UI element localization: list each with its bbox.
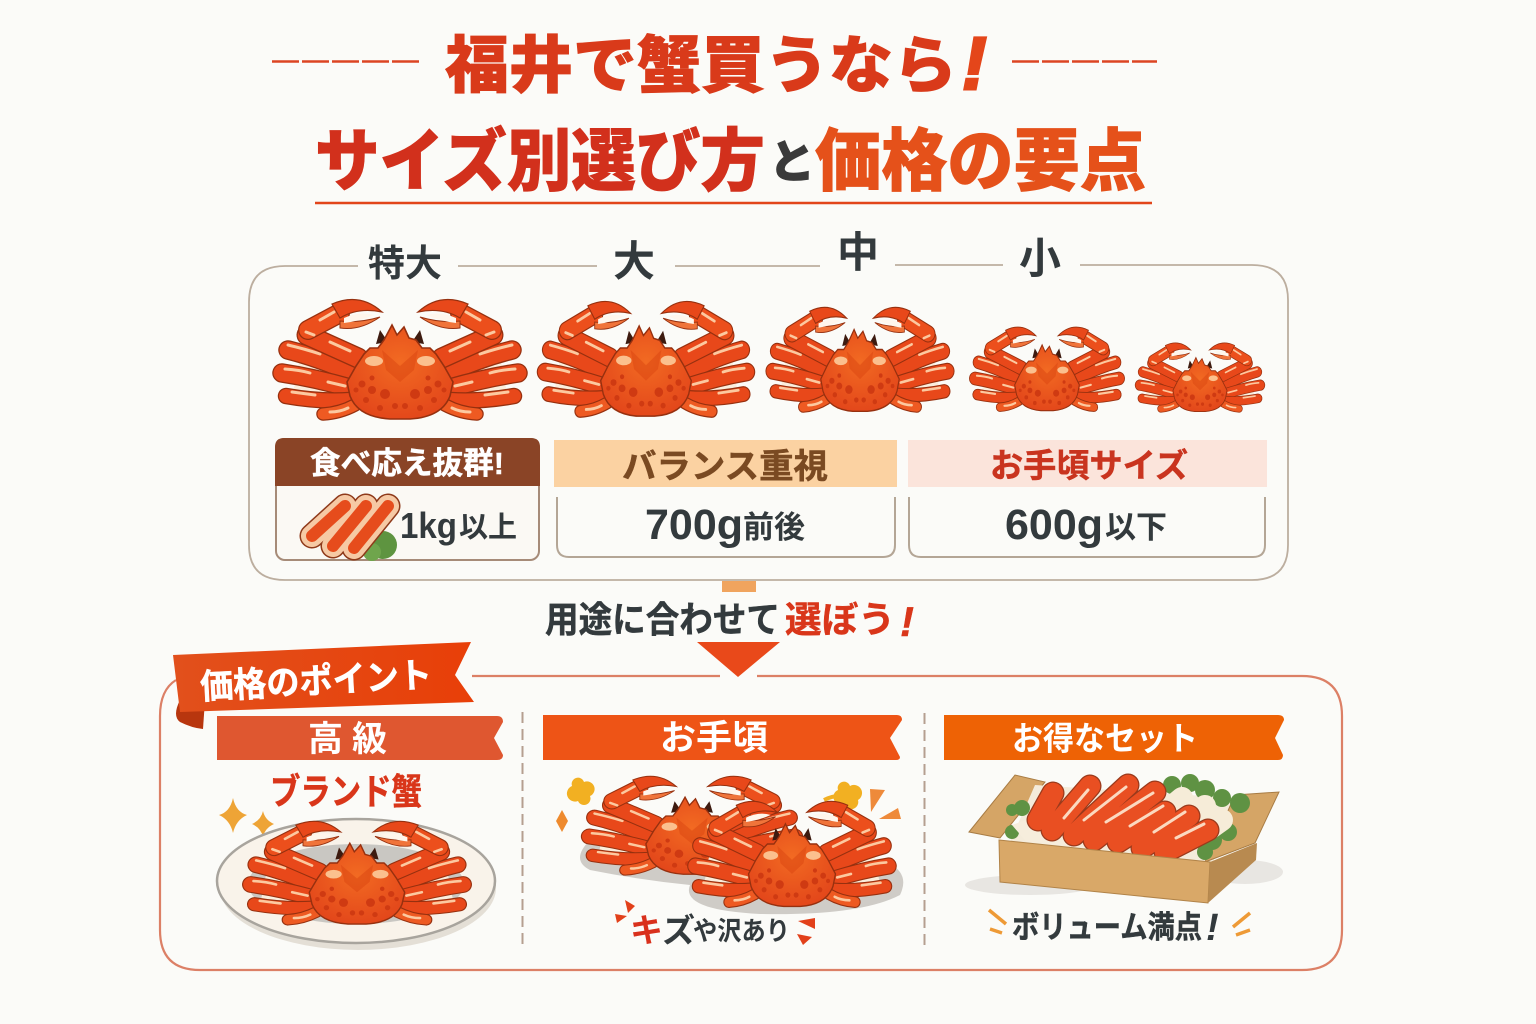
title xyxy=(272,22,1157,203)
banner: value set xyxy=(944,715,1284,760)
icon: sparkles xyxy=(219,798,274,837)
text: damaged goods: ズ xyxy=(662,912,695,949)
card: 700g: 前後 xyxy=(743,510,805,545)
text: brand crab: ブランド蟹 xyxy=(270,771,422,812)
card: 1kg xyxy=(275,438,540,561)
text: damaged goods: キ xyxy=(630,912,663,949)
crab group: rear xyxy=(589,776,795,874)
card: 600g: 以下 xyxy=(1105,510,1167,545)
title: 価格の要点 xyxy=(815,124,1146,200)
ribbon: price points xyxy=(173,642,474,729)
card: 700g: 700g xyxy=(645,501,743,549)
banner: premium: 高級 xyxy=(308,720,387,759)
crab: medium xyxy=(773,307,947,411)
crab: large xyxy=(545,301,747,416)
title: ! xyxy=(962,22,987,105)
label: extra large: 特大 xyxy=(368,243,442,284)
label: small: 小 xyxy=(1019,235,1061,282)
text: damaged goods: や沢あり xyxy=(693,916,790,946)
panel: size guide xyxy=(249,229,1288,580)
crab on plate xyxy=(251,821,463,924)
card: 600g: 600g xyxy=(1005,501,1103,549)
arrow: down xyxy=(697,642,780,677)
title: 福井で蟹買うなら xyxy=(445,32,957,101)
icon: boxed crab legs xyxy=(965,774,1283,903)
text: full volume: ボリューム満点 xyxy=(1012,910,1202,945)
title: サイズ別選び方 xyxy=(315,124,765,200)
icon: crab legs xyxy=(312,506,397,561)
banner: affordable xyxy=(543,715,902,760)
card: 1kg: 食べ応え抜群! xyxy=(310,446,504,481)
plate xyxy=(217,819,496,950)
column: premium xyxy=(217,716,503,950)
title: と xyxy=(769,136,815,188)
banner: premium xyxy=(217,716,503,760)
text: full volume xyxy=(989,907,1250,949)
card: 600g xyxy=(908,440,1267,557)
crab group: front xyxy=(695,801,889,906)
connector: stem xyxy=(722,581,756,592)
label: medium: 中 xyxy=(837,229,879,276)
card: 600g: お手頃サイズ xyxy=(990,447,1188,484)
card: 1kg: 1kg xyxy=(400,505,457,546)
heading: choose by use: 選ぼう xyxy=(785,599,895,640)
text: full volume: ! xyxy=(1206,907,1219,949)
card: 700g xyxy=(554,440,897,557)
heading: choose by use xyxy=(545,598,914,645)
column: affordable xyxy=(543,715,903,949)
card: 700g: バランス重視 xyxy=(622,448,828,486)
banner: affordable: お手頃 xyxy=(660,719,768,758)
card: 1kg: 以上 xyxy=(459,511,517,544)
banner: value set: お得なセット xyxy=(1012,720,1198,757)
crab: small xyxy=(975,327,1119,411)
icon: accents xyxy=(556,778,901,832)
crab: extra large xyxy=(282,300,518,419)
label: large: 大 xyxy=(613,238,655,285)
panel: price points xyxy=(160,642,1342,970)
heading: choose by use: 用途に合わせて xyxy=(545,599,780,640)
column: value set xyxy=(944,715,1284,949)
crab: extra small xyxy=(1140,343,1260,412)
heading: choose by use: ! xyxy=(900,598,914,645)
ribbon: price points: 価格のポイント xyxy=(199,656,433,707)
text: damaged goods xyxy=(615,900,815,949)
shadow xyxy=(580,840,903,914)
